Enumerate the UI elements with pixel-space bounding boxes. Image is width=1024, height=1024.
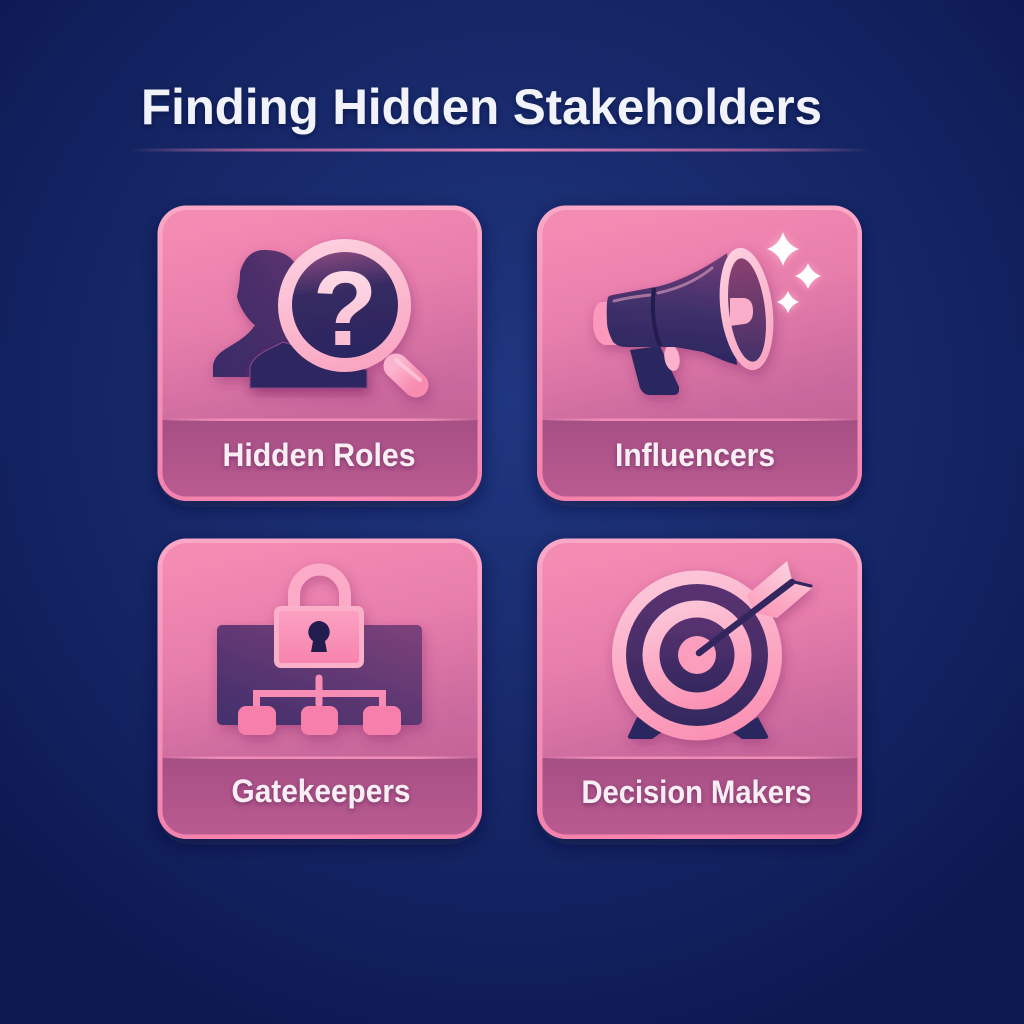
megaphone mouth [713,245,780,373]
megaphone trigger [662,344,682,372]
icon: target with arrow [612,561,812,740]
title underline [130,148,870,152]
icon: lock and hierarchy [217,570,422,735]
megaphone handle [630,346,679,395]
icon: sparkles [767,232,821,313]
panel: decision makers [537,538,862,839]
label: decision makers: Decision Makers [582,774,812,810]
megaphone rear cap [593,302,616,345]
label: hidden roles: Hidden Roles [222,437,416,473]
icon: question mark: ? [313,250,377,368]
icon: people with magnifying glass [213,239,420,388]
panel: influencers [537,206,862,501]
title: Finding Hidden Stakeholders [141,79,822,135]
megaphone body [607,253,737,365]
icon: megaphone [593,232,821,395]
label: influencers: Influencers [615,437,775,473]
panel: gatekeepers [158,538,482,839]
label: gatekeepers: Gatekeepers [232,773,410,809]
panel: hidden roles [158,206,482,501]
